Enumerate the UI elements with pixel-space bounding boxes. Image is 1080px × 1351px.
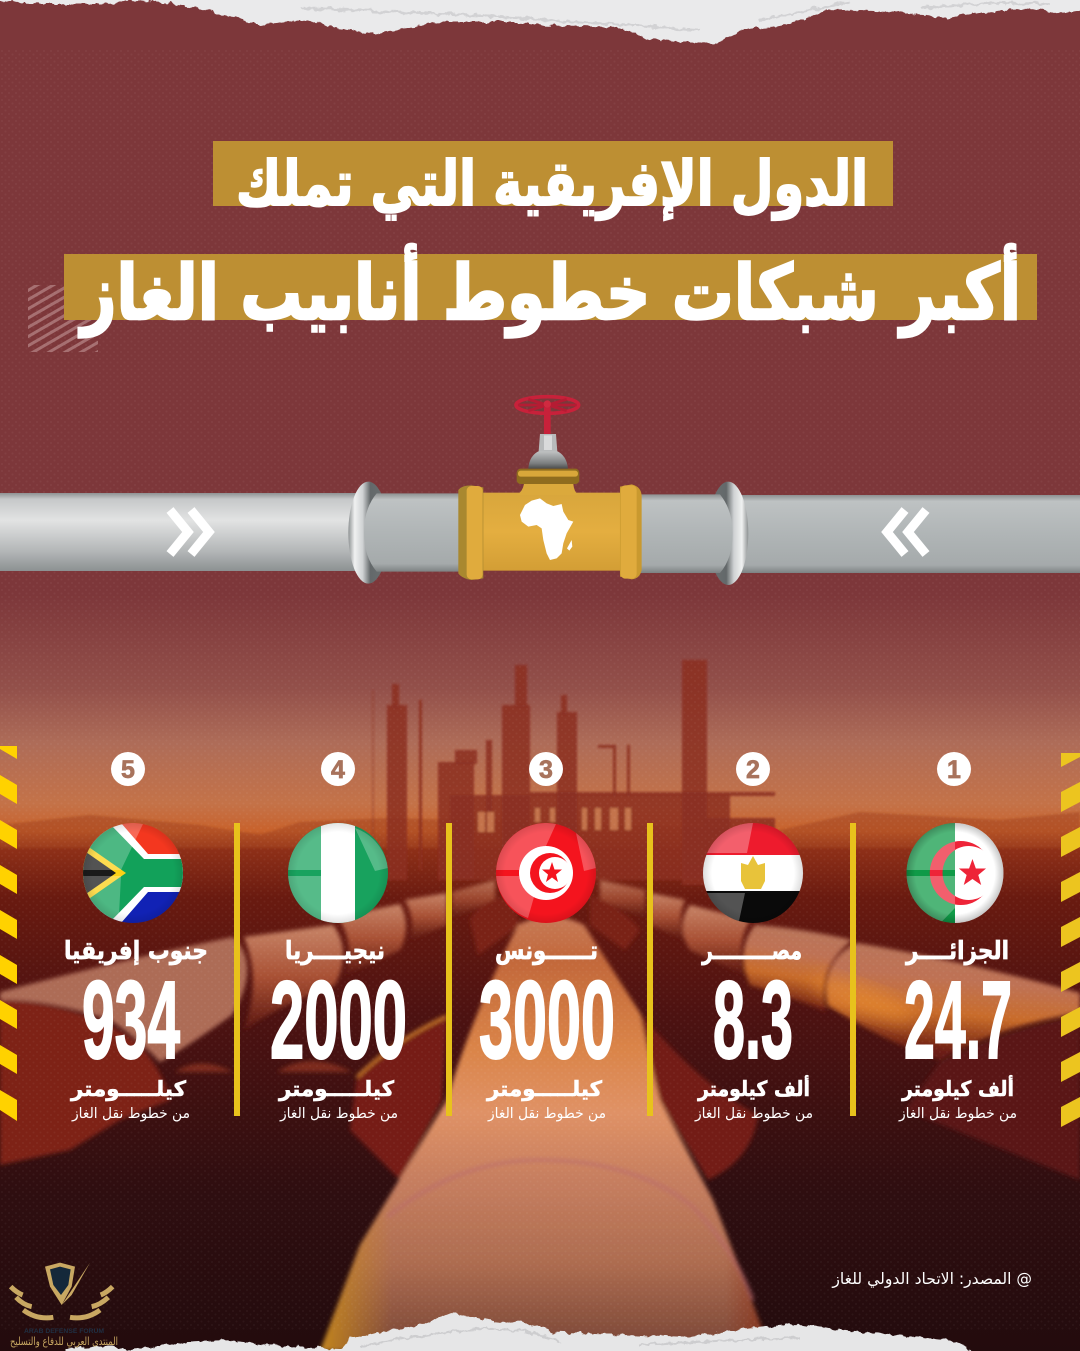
caption: من خطوط نقل الغاز xyxy=(71,1106,190,1122)
torn paper: top xyxy=(0,0,1080,44)
rank badge 3 xyxy=(529,752,563,786)
value: 934: 934 xyxy=(82,959,180,1082)
column 4: Nigeria xyxy=(270,752,407,1122)
title highlight bar: line two xyxy=(64,254,1037,320)
flag: Egypt xyxy=(703,823,803,923)
title line one: الدول الإفريقية التي تملك xyxy=(236,147,868,220)
country name: Egypt: مصـــــــــر xyxy=(700,936,802,966)
rank badge 2 xyxy=(736,752,770,786)
logo emblem xyxy=(11,1263,113,1318)
caption: من خطوط نقل الغاز xyxy=(898,1106,1017,1122)
unit: thousand km: ألف كيلومتر xyxy=(697,1074,810,1101)
country name: Algeria: الجزائــــر xyxy=(904,936,1009,966)
rank badge 1 xyxy=(937,752,971,786)
rank badge 5: 5 xyxy=(121,756,135,784)
unit: thousand km: ألف كيلومتر xyxy=(901,1074,1014,1101)
rank badge 4: 4 xyxy=(331,756,345,784)
unit: km: كيلـــــومتر xyxy=(70,1077,187,1101)
column 3: Tunisia xyxy=(479,752,615,1122)
pipe: left silver section xyxy=(0,493,380,571)
column dividers xyxy=(234,823,856,1116)
pipe: middle silver sections xyxy=(364,493,733,573)
hazard stripes: right xyxy=(1061,737,1080,1127)
background: hills on the horizon xyxy=(0,812,1080,848)
rank badge 5 xyxy=(111,752,145,786)
caption: من خطوط نقل الغاز xyxy=(279,1106,398,1122)
country name: South Africa: جنوب إفريقيا xyxy=(64,936,208,966)
decorative hatch block xyxy=(28,285,98,352)
logo Arabic name: المنتدى العربي للدفاع والتسليح xyxy=(10,1335,118,1348)
rank badge 2: 2 xyxy=(746,756,760,784)
caption: من خطوط نقل الغاز xyxy=(487,1106,606,1122)
pipeline with valve xyxy=(0,397,1080,585)
country name: Nigeria: نيجيــــريا xyxy=(285,936,385,966)
column 2: Egypt xyxy=(694,752,813,1122)
value: 3000: 3000 xyxy=(479,959,615,1082)
icon: map of Africa xyxy=(520,498,573,560)
yellow valve body xyxy=(458,397,642,580)
pipe clamp: right xyxy=(708,482,748,585)
arrow: chevrons pointing right xyxy=(170,510,209,554)
value: 2000: 2000 xyxy=(270,959,407,1082)
valve bonnet xyxy=(528,451,568,469)
caption: من خطوط نقل الغاز xyxy=(694,1106,813,1122)
source note: @ المصدر: الاتحاد الدولي للغاز xyxy=(831,1270,1032,1289)
hazard stripes: left xyxy=(0,730,17,1121)
value: 8.3: 8.3 xyxy=(713,959,793,1082)
arrow: chevrons pointing left xyxy=(887,510,926,554)
flag: Tunisia xyxy=(496,823,596,923)
flag: Nigeria xyxy=(288,823,388,923)
rank badge 4 xyxy=(321,752,355,786)
flag: Algeria xyxy=(906,823,1004,923)
logo Latin name: ARAB DEFENSE FORUM xyxy=(24,1328,104,1335)
country name: Tunisia: تــــــونس xyxy=(495,936,598,966)
title xyxy=(64,141,1037,338)
rank badge 1: 1 xyxy=(947,756,961,784)
unit: km: كيلـــــومتر xyxy=(486,1077,603,1101)
pipe: right silver section xyxy=(720,495,1080,573)
title highlight bar: line one xyxy=(213,141,893,206)
unit: km: كيلـــــومتر xyxy=(278,1077,395,1101)
column 5: South Africa xyxy=(64,752,208,1122)
rank badge 3: 3 xyxy=(539,756,553,784)
flag: South Africa xyxy=(83,823,183,923)
column 1: Algeria xyxy=(898,752,1017,1122)
logo: Arab Defense Forum xyxy=(10,1263,118,1348)
background: pipelines xyxy=(0,880,1080,1351)
torn paper: bottom xyxy=(65,1313,992,1351)
valve hand wheel xyxy=(516,397,579,434)
background: orange glow on the right pipe xyxy=(809,969,921,1031)
pipe clamp: left xyxy=(348,482,388,584)
background: refinery silhouette xyxy=(372,660,775,885)
